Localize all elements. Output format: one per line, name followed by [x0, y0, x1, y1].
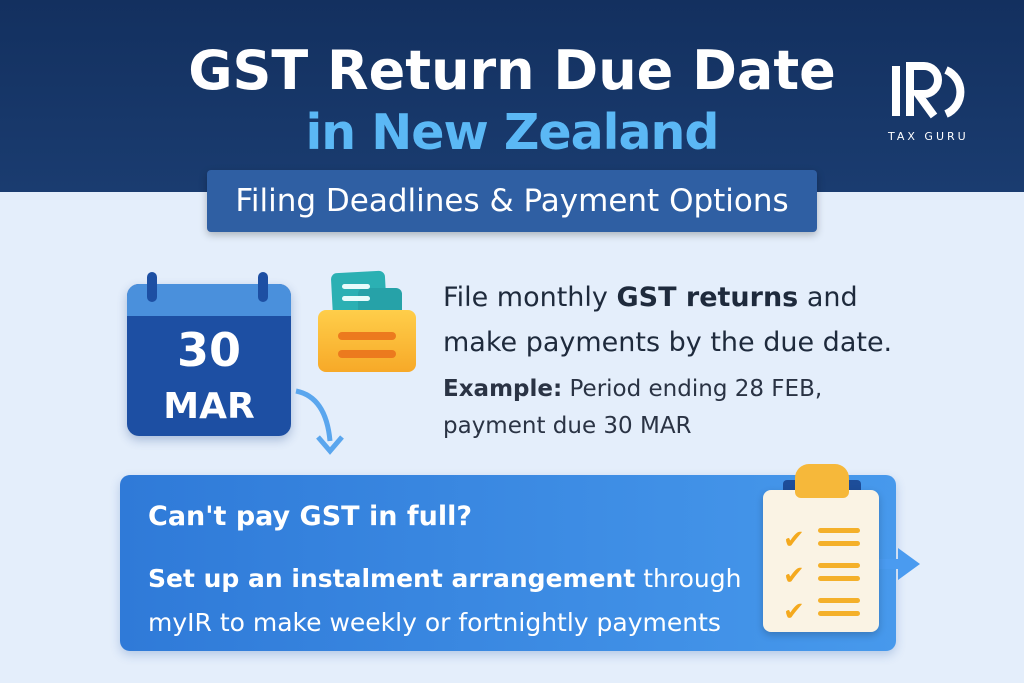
- arrow: right: [896, 548, 920, 580]
- text block: monthly filing: Example: Period ending 28 FEB,: [443, 376, 822, 402]
- icon: clipboard checklist: ✔: [783, 525, 805, 555]
- icon: calendar 30 MAR: 30: [177, 323, 241, 377]
- header band: [0, 0, 1024, 192]
- title: GST Return Due Date: [188, 39, 836, 102]
- text block: monthly filing: payment due 30 MAR: [443, 413, 692, 439]
- text block: monthly filing: [443, 282, 892, 439]
- arrow: curved down: [296, 388, 344, 455]
- icon: folder with documents: [318, 270, 416, 372]
- title: [188, 39, 836, 161]
- icon: clipboard checklist: [760, 464, 882, 638]
- icon: clipboard checklist: ✔: [783, 561, 805, 591]
- panel heading: Can't pay GST in full?: [148, 501, 472, 532]
- logo: IRD Tax Guru: [888, 62, 969, 143]
- title: in New Zealand: [306, 104, 718, 161]
- panel text: myIR to make weekly or fortnightly payments: [148, 608, 721, 637]
- icon: clipboard checklist: ✔: [783, 597, 805, 627]
- text block: monthly filing: make payments by the due date.: [443, 327, 892, 358]
- panel text: [148, 564, 741, 637]
- panel: instalment arrangement: [120, 475, 896, 651]
- logo: IRD Tax Guru: TAX GURU: [888, 130, 969, 143]
- subtitle pill: [207, 170, 817, 232]
- icon: calendar 30 MAR: [122, 272, 296, 446]
- icon: calendar 30 MAR: MAR: [163, 386, 255, 427]
- text block: monthly filing: File monthly GST returns and: [443, 282, 858, 313]
- subtitle pill: Filing Deadlines & Payment Options: [235, 183, 789, 219]
- panel text: Set up an instalment arrangement through: [148, 564, 741, 593]
